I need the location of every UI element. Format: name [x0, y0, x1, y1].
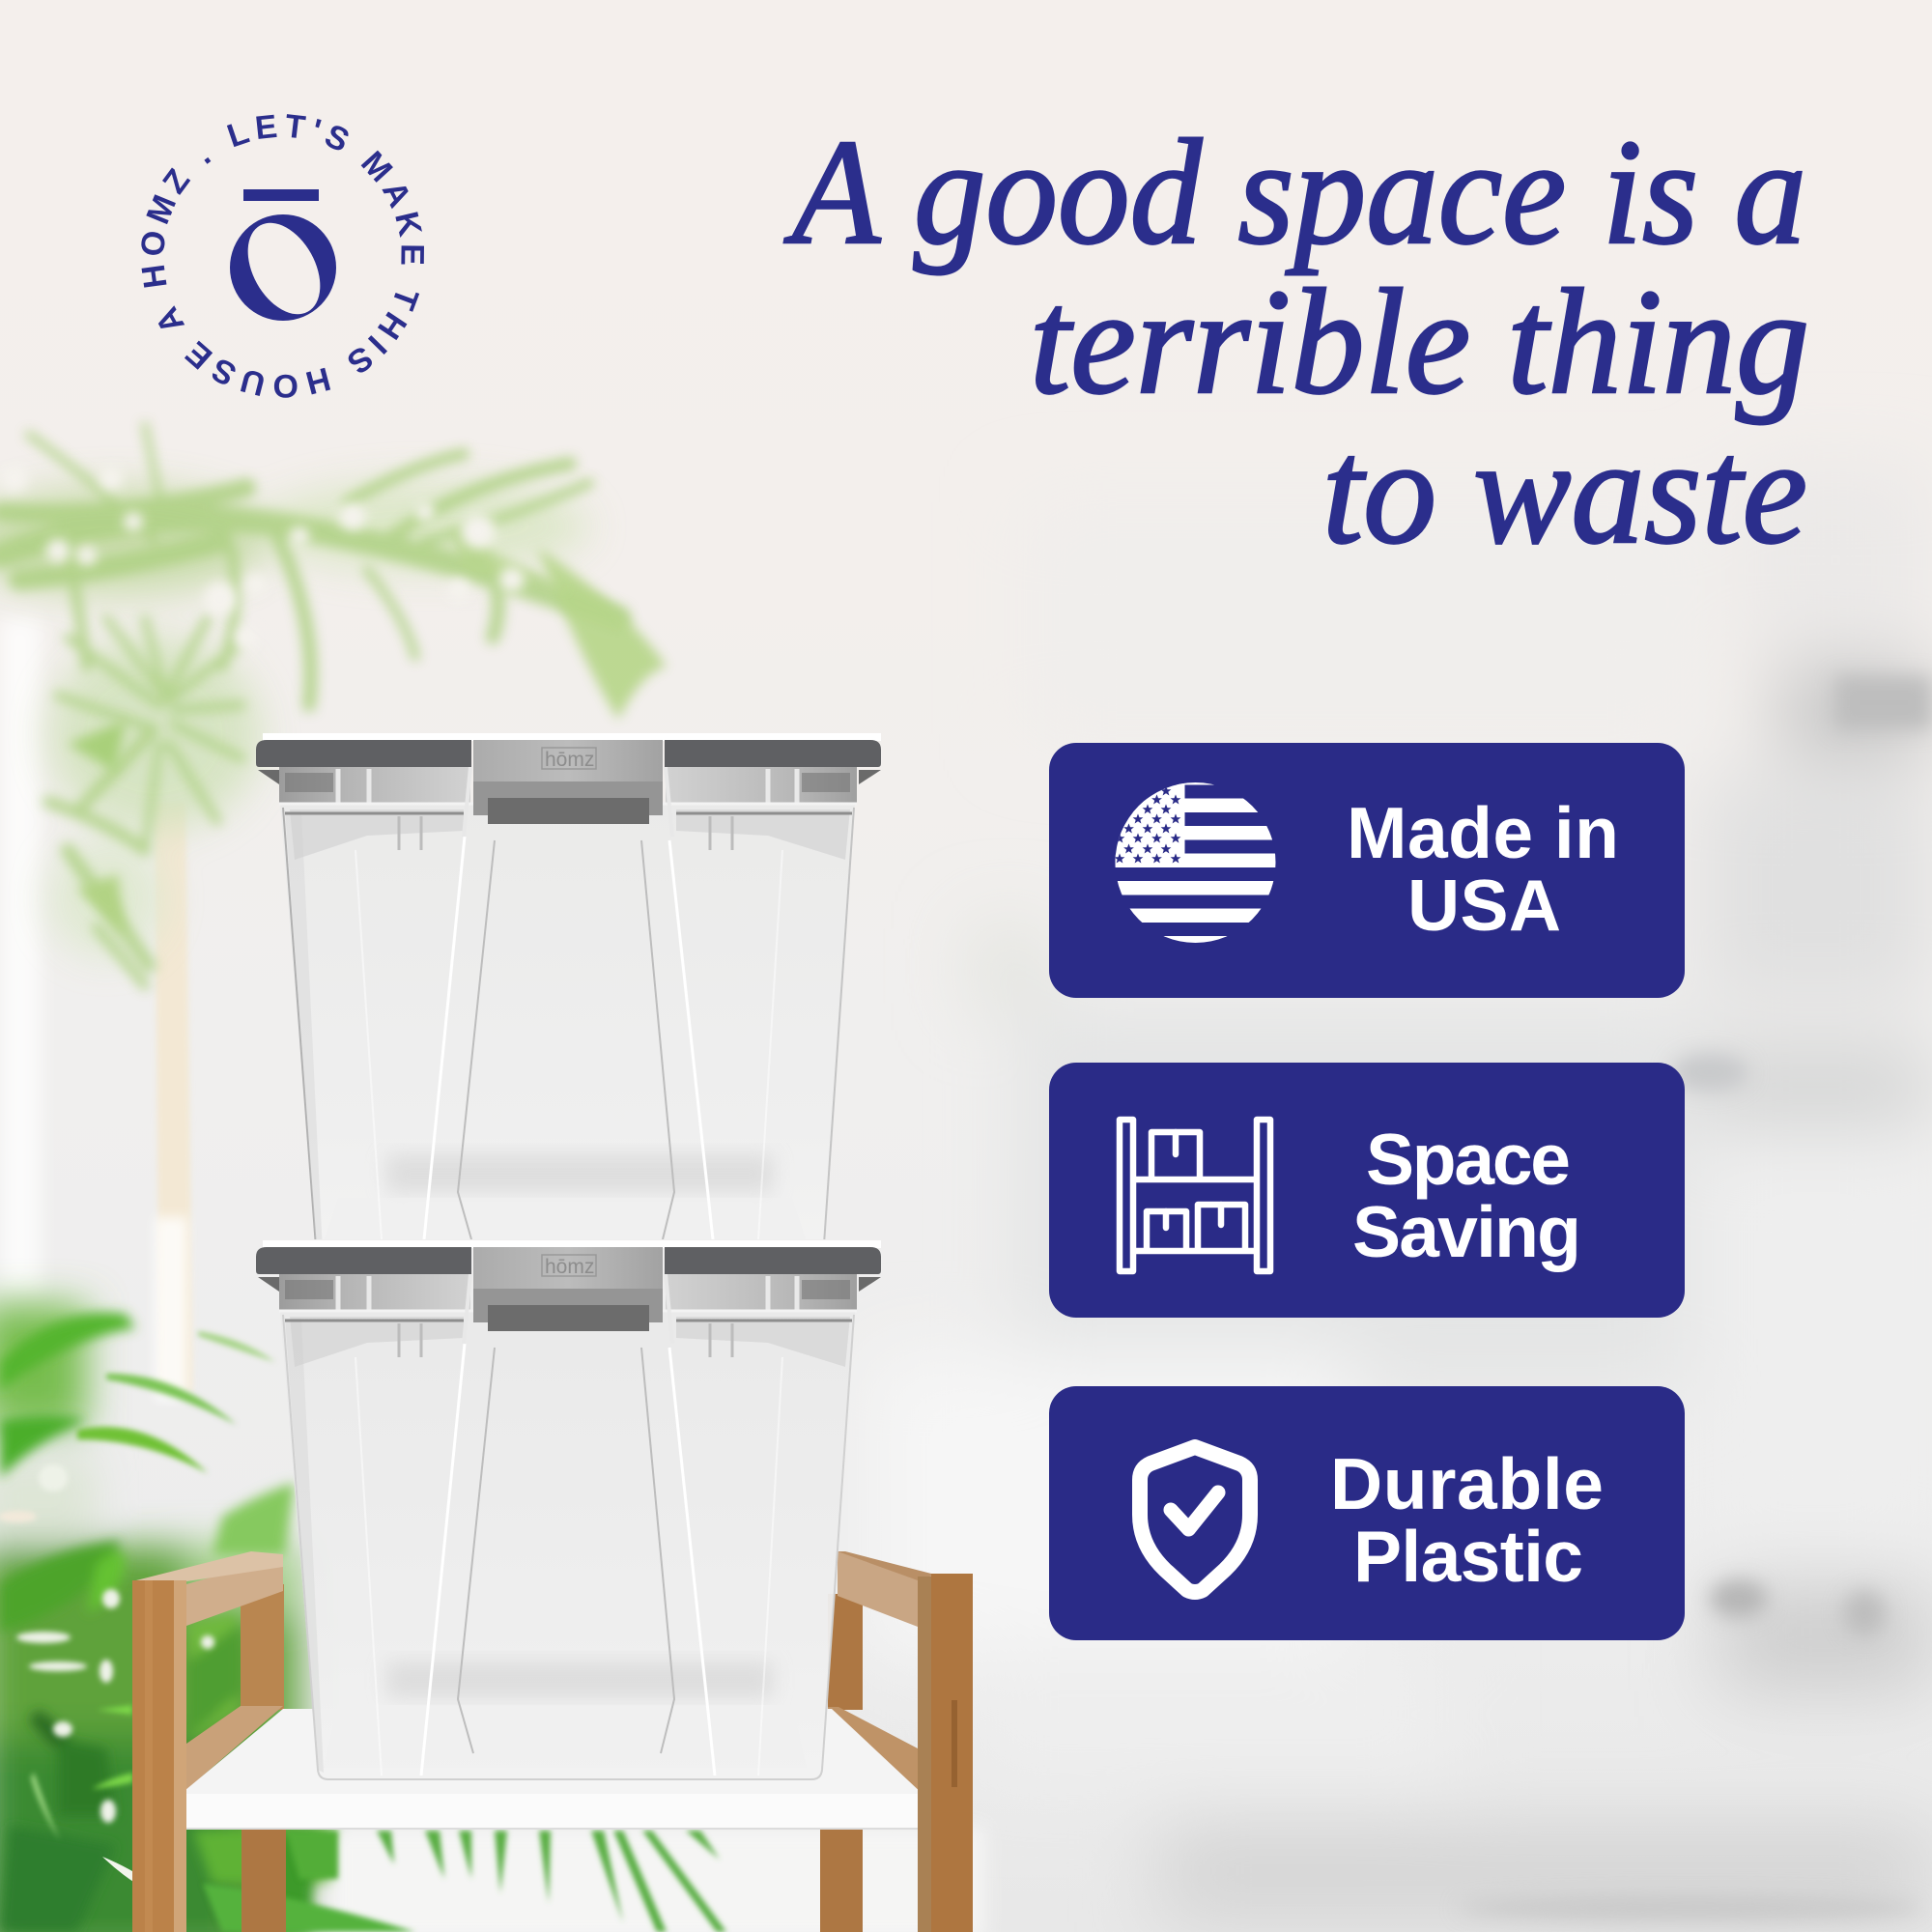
logo macron bar — [243, 189, 319, 201]
blurred narrow leaves under shelf — [328, 1826, 985, 1932]
headline: terrible thing — [1030, 258, 1809, 425]
lower right arm — [828, 1707, 918, 1791]
label: durable plastic: Plastic — [1353, 1516, 1583, 1597]
rear posts — [241, 1584, 284, 1710]
logo: circular badge — [141, 114, 424, 398]
label: made in USA: Made in — [1347, 792, 1619, 873]
panel: made in USA — [1049, 743, 1685, 998]
logo ring text: LET'S MAKE THIS HOUSE A HOMZ . — [141, 114, 424, 398]
icon: shield with check — [1140, 1447, 1250, 1592]
headline — [783, 108, 1809, 575]
label: made in USA: USA — [1407, 865, 1561, 946]
right front post — [918, 1577, 931, 1932]
panel: durable plastic — [1049, 1386, 1685, 1640]
left front post — [132, 1580, 174, 1932]
label: space saving: Space — [1366, 1119, 1571, 1200]
wooden shelf stand — [132, 1551, 973, 1932]
panel: space saving — [1049, 1063, 1685, 1318]
label: durable plastic — [1330, 1443, 1604, 1597]
logo letter o — [230, 211, 336, 327]
headline: A good space is a — [783, 108, 1806, 275]
white shelf top — [180, 1709, 923, 1795]
label: space saving — [1352, 1119, 1581, 1272]
lower left arm — [186, 1706, 283, 1790]
label: space saving: Saving — [1352, 1191, 1581, 1272]
upper right arm — [838, 1551, 935, 1627]
blurred room background — [0, 418, 1932, 1932]
icon: USA flag circle — [1111, 771, 1285, 951]
storage box: lower: hōmz — [545, 1256, 594, 1278]
label: durable plastic: Durable — [1330, 1443, 1604, 1524]
headline: to waste — [1322, 408, 1807, 575]
lower-left green foliage — [0, 1304, 985, 1932]
blurred tree trunk — [155, 802, 193, 1391]
icon: warehouse shelf with boxes — [1120, 1120, 1270, 1271]
upper left arm — [186, 1567, 283, 1626]
pale palm fronds — [0, 425, 667, 985]
storage box: lower — [256, 1240, 881, 1779]
storage box: upper: hōmz — [545, 749, 594, 771]
storage box: upper — [256, 733, 881, 1272]
label: made in USA — [1347, 792, 1619, 946]
